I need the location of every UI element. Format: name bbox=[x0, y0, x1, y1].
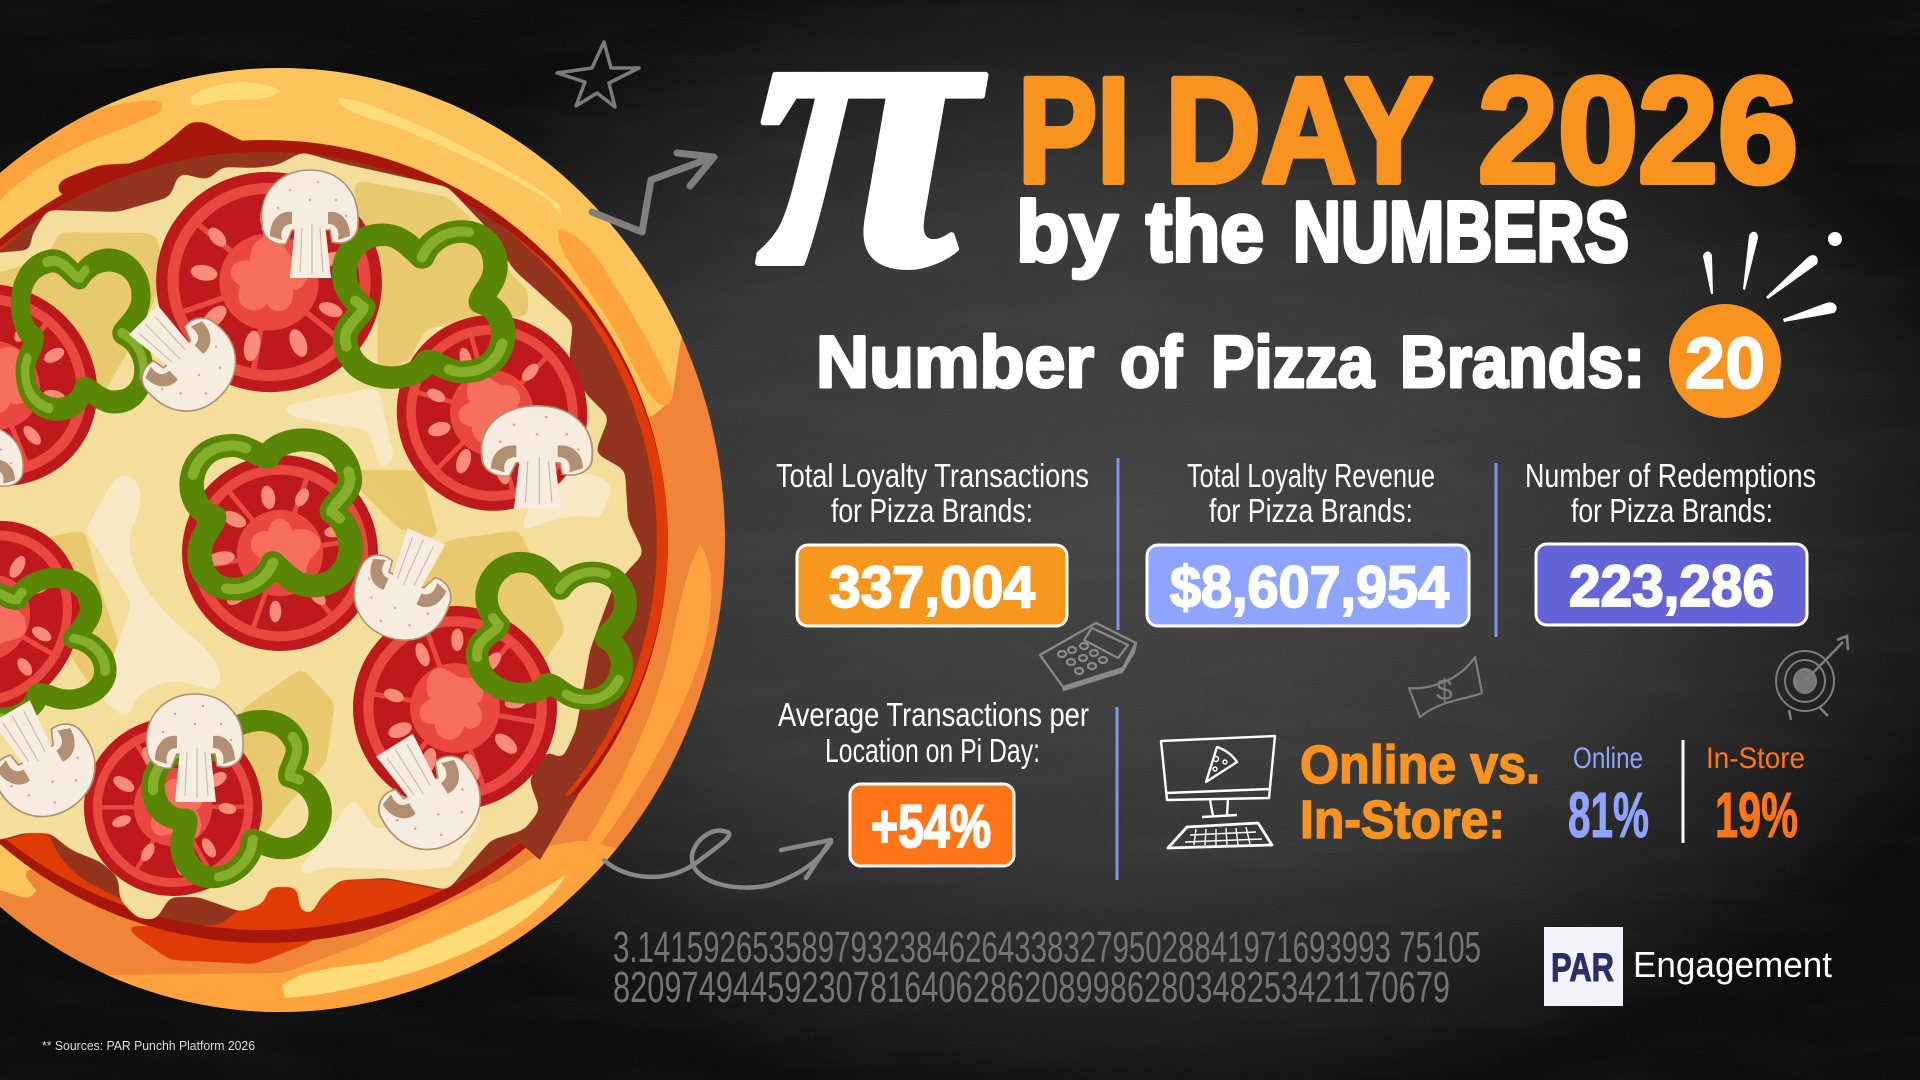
doodle: zigzag arrow bbox=[592, 153, 714, 232]
title: pi day 2026: 2026 bbox=[1478, 46, 1798, 214]
icon: dollar bill: $ bbox=[1436, 674, 1453, 707]
value box: +54% bbox=[850, 784, 1014, 866]
heading: number of pizza brands: Pizza bbox=[1211, 322, 1375, 403]
pizza crust bbox=[0, 68, 725, 1012]
heading: number of pizza brands: Number bbox=[816, 322, 1094, 403]
stat: online 81%: Online bbox=[1573, 742, 1643, 775]
sauce bbox=[0, 122, 668, 960]
heading: number of pizza brands: of bbox=[1120, 322, 1183, 403]
subtitle: by the numbers: NUMBERS bbox=[1293, 185, 1629, 280]
panel: redemptions: for Pizza Brands: bbox=[1571, 492, 1773, 529]
label: redemptions: Number of Redemptions bbox=[1525, 457, 1816, 494]
panel: loyalty revenue bbox=[1147, 457, 1469, 626]
panel: average transactions: Location on Pi Day: bbox=[825, 732, 1040, 769]
icon: burst sparks bbox=[1703, 232, 1842, 322]
icon: calculator bbox=[1040, 623, 1136, 690]
icon: target with arrow bbox=[1776, 636, 1848, 720]
logo: PAR Engagement: PAR bbox=[1551, 946, 1614, 990]
source note: ** Sources: PAR Punchh Platform 2026 bbox=[42, 1038, 255, 1053]
panel: online vs in-store bbox=[1161, 735, 1805, 851]
panel: online vs in-store: In-Store: bbox=[1300, 790, 1505, 850]
green pepper rings bbox=[0, 232, 637, 889]
label: loyalty revenue: Total Loyalty Revenue bbox=[1187, 457, 1435, 494]
stat: online 81% bbox=[1568, 742, 1649, 851]
icon: dollar bill bbox=[1409, 657, 1482, 717]
label: loyalty transactions: Total Loyalty Transactions bbox=[776, 457, 1089, 494]
subtitle: by the numbers: by bbox=[1016, 185, 1118, 280]
logo: PAR Engagement bbox=[1544, 927, 1832, 1006]
subtitle: by the numbers: the bbox=[1146, 185, 1264, 280]
panel: average transactions bbox=[778, 696, 1089, 866]
pi digits: 3.1415926535897932384626433832795028841971693993 75105 bbox=[613, 923, 1481, 972]
badge: 20 brands bbox=[1669, 304, 1781, 418]
stat: in-store 19%: 19% bbox=[1715, 779, 1798, 851]
value box: $8,607,954: $8,607,954 bbox=[1170, 555, 1449, 620]
tomato slices bbox=[0, 154, 609, 929]
subtitle: by the numbers bbox=[1016, 185, 1629, 280]
panel: loyalty revenue: for Pizza Brands: bbox=[1209, 492, 1413, 529]
stat: online 81%: 81% bbox=[1568, 779, 1649, 851]
title: pi day 2026: DAY bbox=[1165, 46, 1433, 214]
pi digits bbox=[613, 923, 1481, 1012]
title: pi day 2026: PI bbox=[1018, 46, 1130, 214]
value box: 223,286 bbox=[1536, 544, 1807, 625]
illustration: pizza bbox=[0, 68, 725, 1012]
title: pi day 2026 bbox=[1018, 46, 1798, 214]
pi digits: 8209749445923078164062862089986280348253421170679 bbox=[613, 963, 1450, 1012]
stat: in-store 19% bbox=[1706, 742, 1805, 851]
heading: number of pizza brands bbox=[816, 322, 1645, 403]
panel: loyalty transactions bbox=[776, 457, 1089, 626]
badge: 20 brands: 20 bbox=[1685, 324, 1765, 404]
panel: loyalty transactions: for Pizza Brands: bbox=[831, 492, 1033, 529]
value box: +54%: +54% bbox=[871, 793, 991, 860]
icon: computer with pizza bbox=[1161, 736, 1275, 848]
heading: number of pizza brands: Brands: bbox=[1400, 322, 1645, 403]
value box: 337,004 bbox=[797, 545, 1067, 626]
value box: 337,004: 337,004 bbox=[829, 555, 1035, 620]
doodle: star bbox=[557, 42, 639, 107]
value box: 223,286: 223,286 bbox=[1569, 554, 1774, 619]
stat: in-store 19%: In-Store bbox=[1706, 742, 1805, 775]
doodle: curly arrow bbox=[604, 831, 831, 888]
label: average transactions: Average Transactions per bbox=[778, 696, 1089, 733]
panel: redemptions bbox=[1525, 457, 1816, 625]
cheese bbox=[0, 152, 644, 920]
heading: online vs in-store: Online vs. bbox=[1300, 735, 1540, 795]
mushrooms bbox=[0, 170, 592, 868]
logo: PAR Engagement: Engagement bbox=[1633, 944, 1832, 985]
